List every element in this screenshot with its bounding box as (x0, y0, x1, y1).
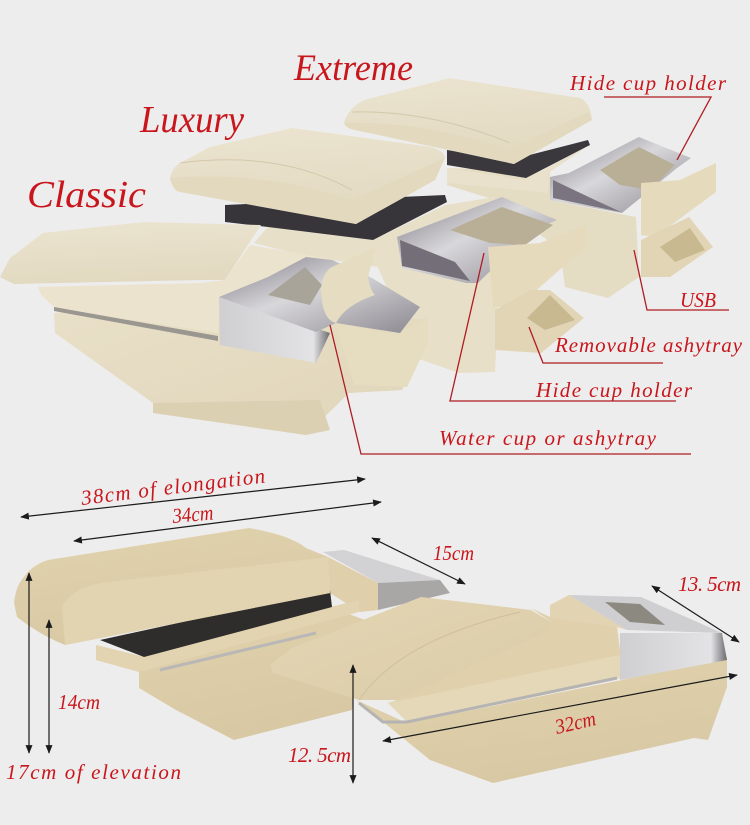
body (254, 197, 498, 373)
dimension: 38cm of elongation (21, 464, 365, 517)
cup opening (600, 147, 675, 190)
chrome cup surround (397, 197, 557, 283)
chrome strip (160, 633, 316, 670)
dimension: 34cm (74, 500, 381, 541)
dimension: 32cm: 32cm (552, 706, 598, 739)
dimension: 15cm: 15cm (433, 541, 474, 565)
chrome rear (323, 550, 440, 583)
beige knob (550, 595, 627, 630)
callout: removable ashtray (529, 327, 743, 363)
callout: removable ashtray: Removable ashytray (554, 333, 743, 357)
dimension: 14cm (49, 620, 100, 753)
rear beige (328, 557, 378, 612)
label: Luxury: Luxury (139, 99, 244, 141)
callout: hide cup holder (lower) (450, 253, 693, 402)
dimension: 13.5cm: 13. 5cm (678, 572, 741, 596)
ashtray (641, 217, 713, 277)
label: Extreme: Extreme (293, 48, 413, 89)
dimension: 38cm of elongation: 38cm of elongation (79, 464, 266, 510)
body (356, 657, 727, 783)
callout: hide cup holder (top) (569, 71, 727, 160)
dimension: 14cm: 14cm (58, 690, 100, 714)
dark mirror panel (553, 180, 621, 212)
armrest: Luxury (170, 128, 586, 373)
lid (14, 528, 330, 645)
dimension: 17cm of elevation: 17cm of elevation (6, 760, 181, 784)
cup opening (450, 207, 553, 245)
lid (0, 222, 261, 284)
chrome top (219, 257, 420, 333)
chrome side panel (219, 297, 330, 363)
callout: hide cup holder (top): Hide cup holder (569, 71, 727, 95)
dimension: 34cm: 34cm (170, 500, 214, 528)
cup tray (641, 163, 716, 237)
dark mirror panel (400, 240, 470, 281)
flap (321, 247, 376, 323)
armrest: dimension view right (270, 595, 727, 783)
callout: water cup or ashtray (330, 325, 691, 454)
armrest: dimension view left (14, 528, 450, 740)
chrome cup surround (550, 137, 691, 213)
dimension: 13.5cm (652, 572, 741, 642)
chrome front (620, 633, 727, 680)
body and deck (447, 168, 639, 298)
cup opening (268, 267, 322, 305)
chrome strip (54, 307, 218, 341)
mechanism (447, 140, 590, 178)
dimension: 15cm (372, 538, 474, 584)
deck (388, 608, 620, 720)
chrome strip (359, 678, 617, 722)
dimension: 32cm (383, 675, 737, 741)
deck side (96, 600, 359, 672)
armrest: Classic (0, 222, 428, 435)
lid (270, 597, 553, 700)
body (54, 300, 428, 435)
callout: USB: USB (680, 288, 716, 312)
cup tray (488, 225, 586, 307)
deck strip (447, 146, 588, 193)
body (96, 607, 365, 740)
chrome top (569, 595, 722, 633)
mechanism (100, 590, 332, 657)
lid (170, 128, 445, 224)
callout: USB (634, 250, 729, 312)
tray (335, 317, 428, 387)
base step (153, 400, 330, 435)
callout: water cup or ashtray: Water cup or ashytray (439, 426, 657, 450)
label: Classic: Classic (27, 174, 146, 216)
dimension: 12.5cm: 12. 5cm (288, 743, 351, 767)
lid (344, 78, 592, 164)
dimension: 12.5cm (288, 665, 353, 783)
armrest: Extreme (344, 78, 716, 298)
ashtray (495, 290, 584, 353)
deck (38, 245, 335, 333)
callout: hide cup holder (lower): Hide cup holder (535, 378, 693, 402)
mechanism (225, 195, 447, 240)
